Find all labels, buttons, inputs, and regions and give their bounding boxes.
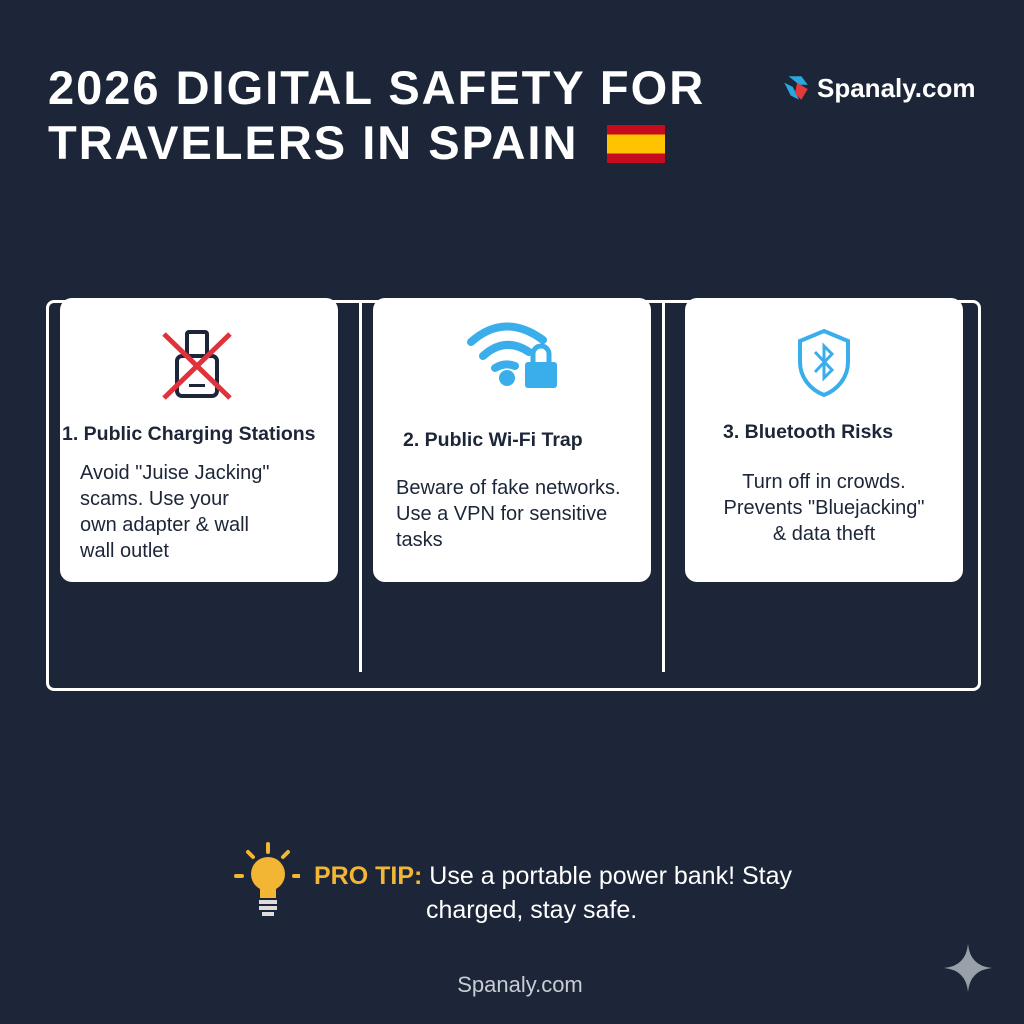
- panel: charging stations: 1. Public Charging Stations: [62, 423, 316, 445]
- frame: [46, 300, 981, 691]
- panel: wifi: Beware of fake networks.: [396, 477, 621, 499]
- icon: sparkle: [944, 944, 992, 992]
- icon: crossed usb: [162, 330, 232, 400]
- panel: wifi: tasks: [396, 529, 443, 551]
- panel: charging stations: Avoid "Juise Jacking": [80, 462, 269, 484]
- title: [48, 61, 705, 169]
- icon: bluetooth shield: [798, 328, 850, 398]
- panel: wifi: [373, 298, 651, 582]
- icon: bulb: [234, 842, 300, 916]
- pro tip: PRO TIP: Use a portable power bank! Stay: [314, 862, 792, 890]
- panel: charging stations: scams. Use your: [80, 488, 229, 510]
- panel: charging stations: wall outlet: [80, 540, 169, 562]
- pro tip: [234, 842, 792, 924]
- panel: bluetooth: [685, 298, 963, 582]
- panel: charging stations: [60, 298, 338, 582]
- footer: Spanaly.com: [457, 972, 583, 997]
- panel: bluetooth: Prevents "Bluejacking": [724, 497, 924, 519]
- panel: bluetooth: Turn off in crowds.: [742, 471, 906, 493]
- panel: bluetooth: 3. Bluetooth Risks: [723, 421, 893, 443]
- panel: wifi: 2. Public Wi-Fi Trap: [403, 429, 583, 451]
- panel: wifi: Use a VPN for sensitive: [396, 503, 607, 525]
- panel: bluetooth: & data theft: [773, 523, 875, 545]
- title: 2026 DIGITAL SAFETY FOR: [48, 61, 705, 114]
- title: TRAVELERS IN SPAIN: [48, 116, 578, 169]
- panel: charging stations: own adapter & wall: [80, 514, 249, 536]
- icon: wifi lock: [467, 322, 557, 388]
- logo: Spanaly.com: [817, 72, 975, 102]
- pro tip: charged, stay safe.: [426, 896, 637, 924]
